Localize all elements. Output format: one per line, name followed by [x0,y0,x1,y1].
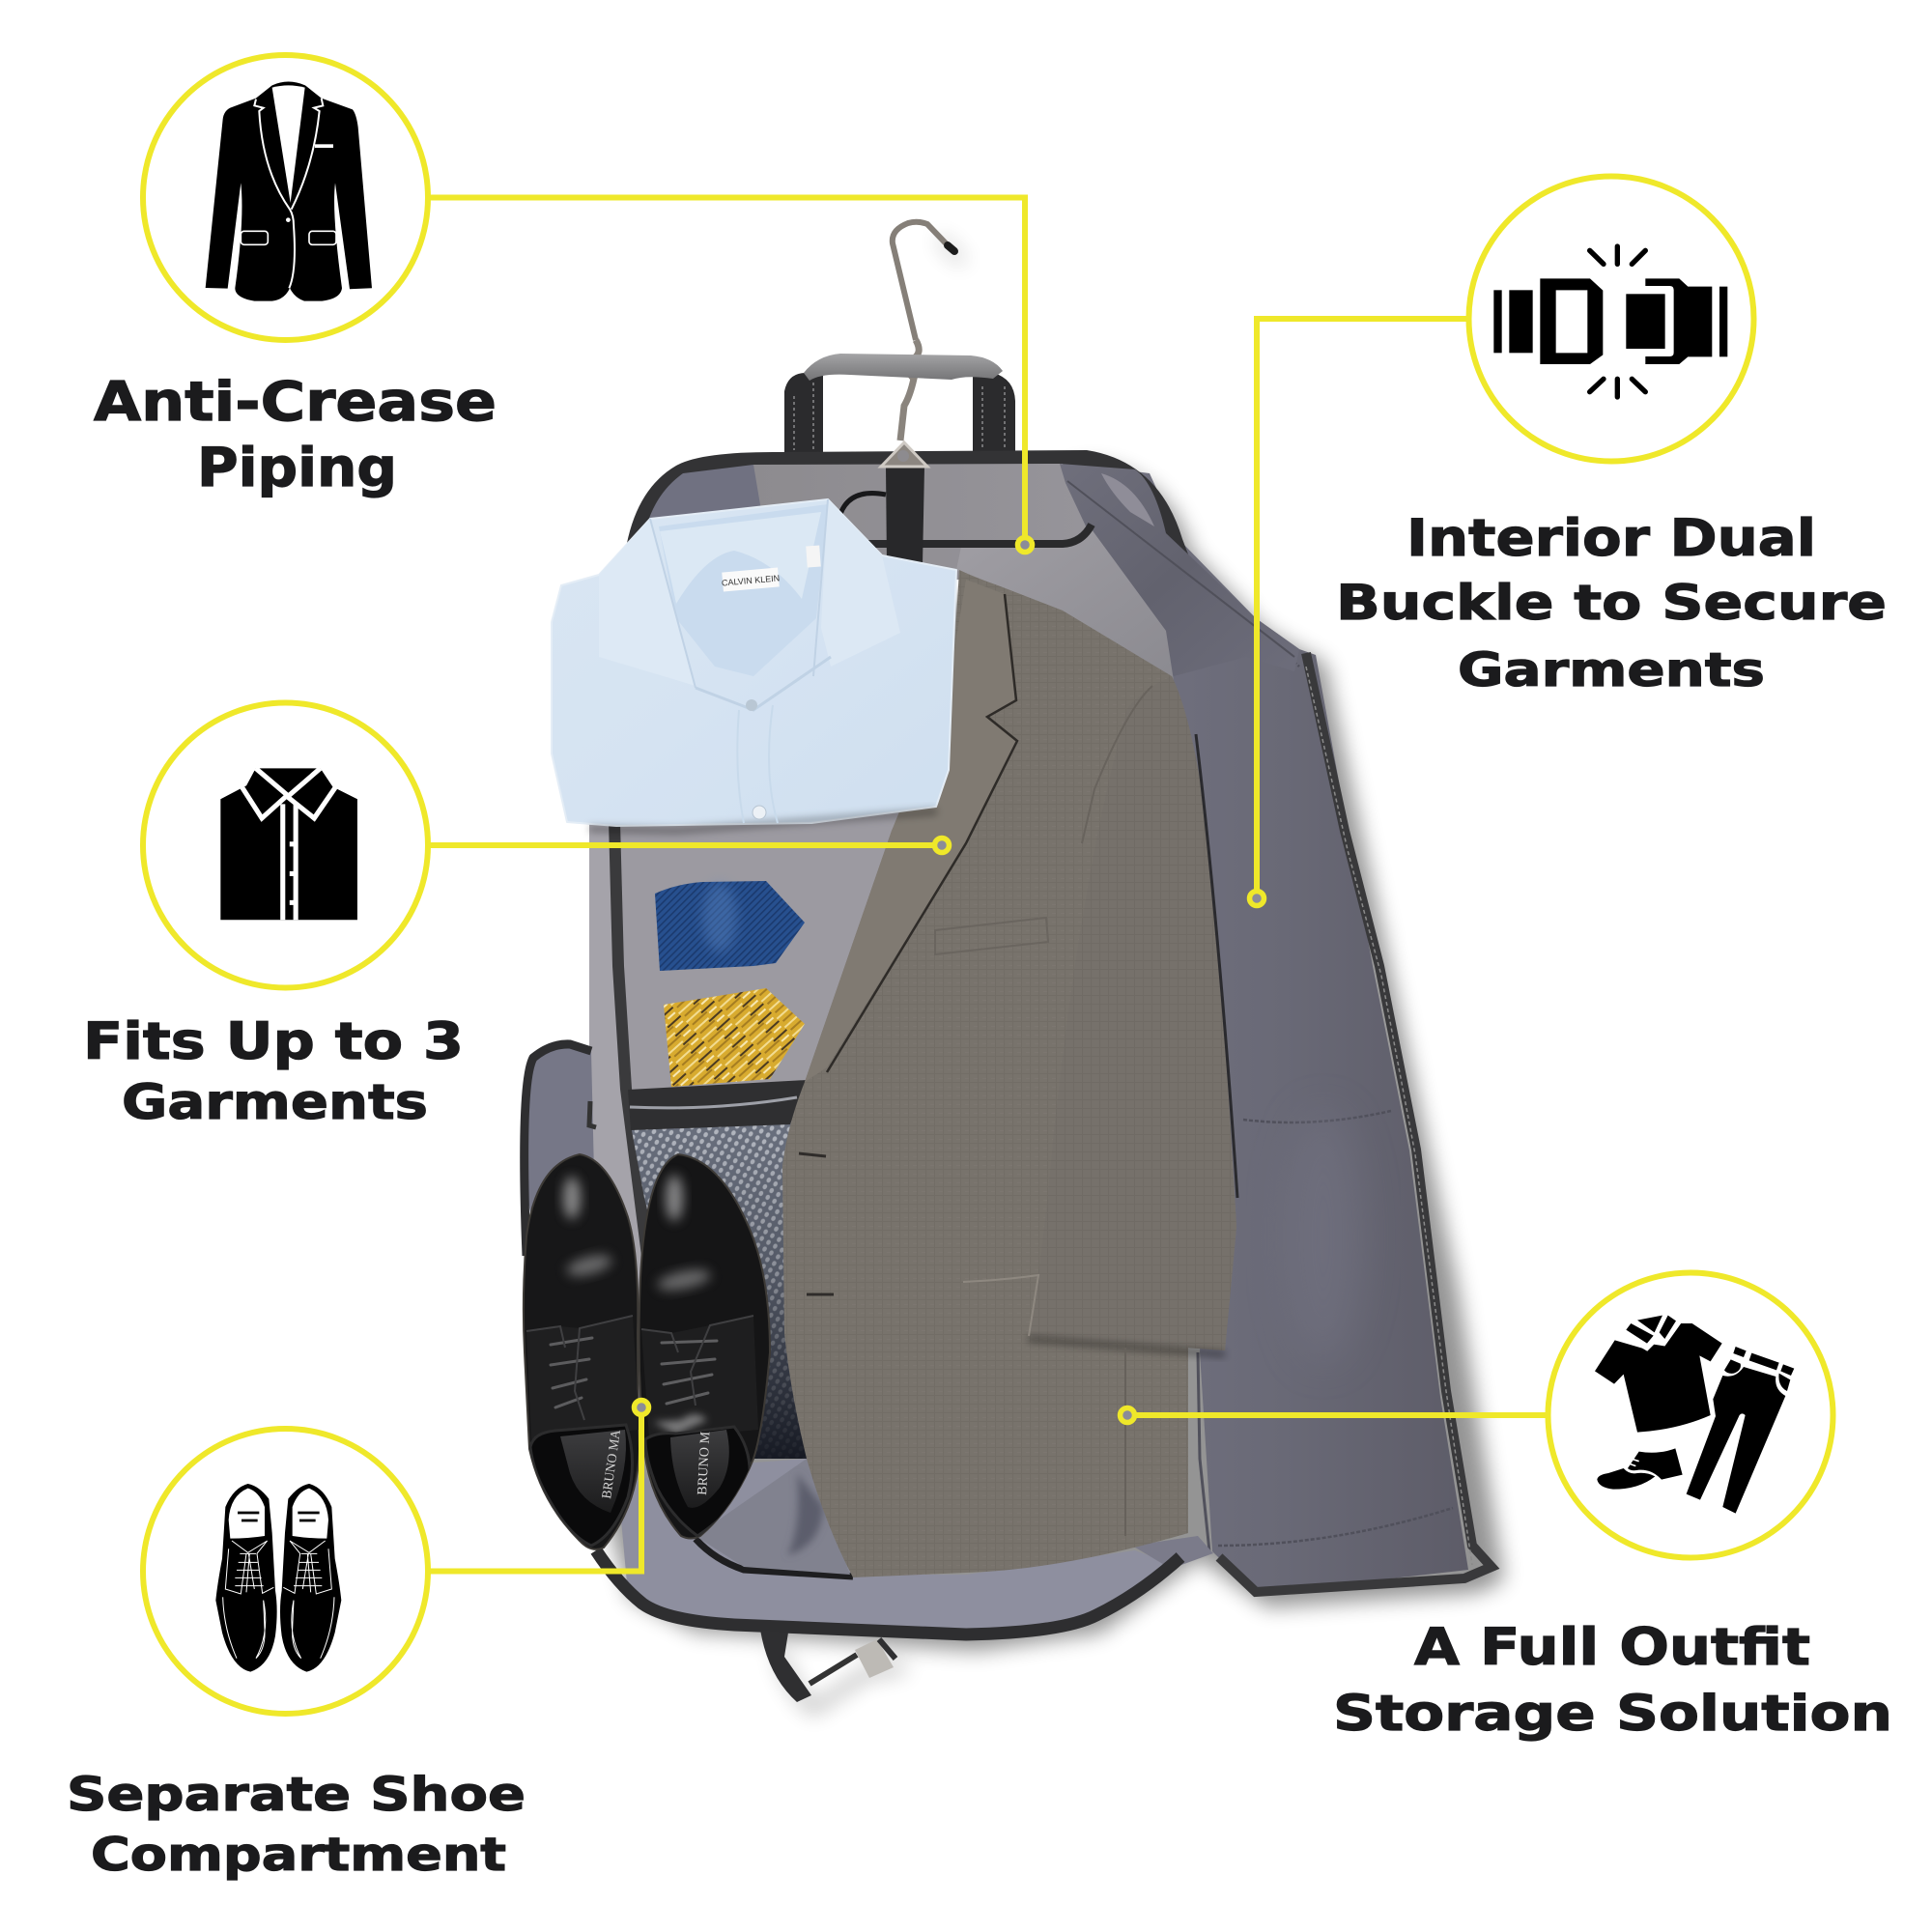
shirt collar leaves [599,519,696,686]
circle badge [1468,176,1754,462]
left black shoe: BRUNO MA [600,1428,624,1500]
feature: anti-crease piping: Piping [197,437,397,498]
interior black binding [614,821,647,1256]
hanger hook and chain [893,222,954,440]
icon: pair of shoes [215,1484,341,1672]
lid black edge band [1219,653,1492,1592]
circle badge [1548,1273,1833,1557]
feature: anti-crease piping [94,55,497,498]
calvin klein label [721,567,781,592]
label: interior dual buckle: Interior Dual [1406,509,1816,568]
lower hanger seam panel [956,529,1174,681]
top carry handle [784,354,1015,452]
jacket buttonholes [799,1153,834,1294]
bag body back panel top [623,442,1299,681]
circle badge [143,703,428,987]
lid silk fold [1060,464,1299,676]
right black shoe [639,1154,770,1538]
feature: fits up to 3 garments: Garments [122,1074,428,1130]
label: separate shoe compartment: Separate Shoe [67,1768,526,1822]
icon: seat-belt style buckle [1493,246,1727,397]
feature: full outfit storage [1333,1273,1892,1743]
soft drop shadow [553,238,1504,1709]
icon: folded shirt [220,768,357,920]
jacket sleeve [1028,676,1236,1350]
label: full outfit storage: A Full Outfit [1414,1618,1810,1677]
label: fits up to 3 garments: Fits Up to 3 [83,1012,464,1071]
callout line: fits up to 3 garments [428,838,949,852]
callout line: separate shoe compartment [428,1401,649,1571]
calvin klein label: CALVIN KLEIN [722,573,781,588]
circle badge [143,1429,428,1714]
bag product photo illustration [522,222,1504,1709]
circle badge [143,55,428,340]
feature: interior dual buckle [1336,176,1887,697]
right black shoe: BRUNO M [696,1431,713,1495]
jacket lower pocket flap [963,1275,1038,1336]
size tag [806,546,821,567]
icon: shirt, trousers and shoe [1595,1316,1794,1514]
left black shoe [524,1154,639,1549]
callout line: full outfit storage [1121,1408,1548,1422]
feature: fits up to 3 garments [83,703,464,1130]
gold tie [664,988,805,1087]
right shoe icon [280,1484,341,1672]
label: anti-crease piping: Anti-Crease [94,371,497,434]
jacket lapel [805,580,1016,1082]
central interior panel [620,811,927,1092]
callout line: interior dual buckle [1250,319,1468,906]
icon: blazer jacket [206,81,372,301]
callout line: anti-crease piping [428,197,1032,553]
shirt inner collar [659,504,828,676]
pocket zipper band [628,1080,807,1130]
left interior strip [589,811,676,1449]
bottom handle and clip [760,1630,895,1702]
shoe compartment [522,1044,596,1275]
shirt placket and buttons [737,705,778,823]
right lid panel [1060,462,1492,1594]
navy tie [655,881,805,971]
folded light blue shirt [552,499,956,831]
feature: separate shoe compartment [67,1429,526,1882]
garment loop and strap [840,494,886,514]
jacket chest pocket [935,918,1048,954]
bottom zipper edge [596,1550,1180,1634]
bottom lining [618,1459,1213,1637]
feature: full outfit storage: Storage Solution [1333,1686,1892,1743]
feature: separate shoe compartment: Compartment [91,1829,506,1882]
grey suit jacket [782,570,1237,1577]
feature: interior dual buckle: Buckle to Secure [1336,575,1887,631]
left shoe icon [215,1484,277,1672]
feature: interior dual buckle: Garments [1458,643,1765,697]
mesh pocket [631,1121,807,1459]
